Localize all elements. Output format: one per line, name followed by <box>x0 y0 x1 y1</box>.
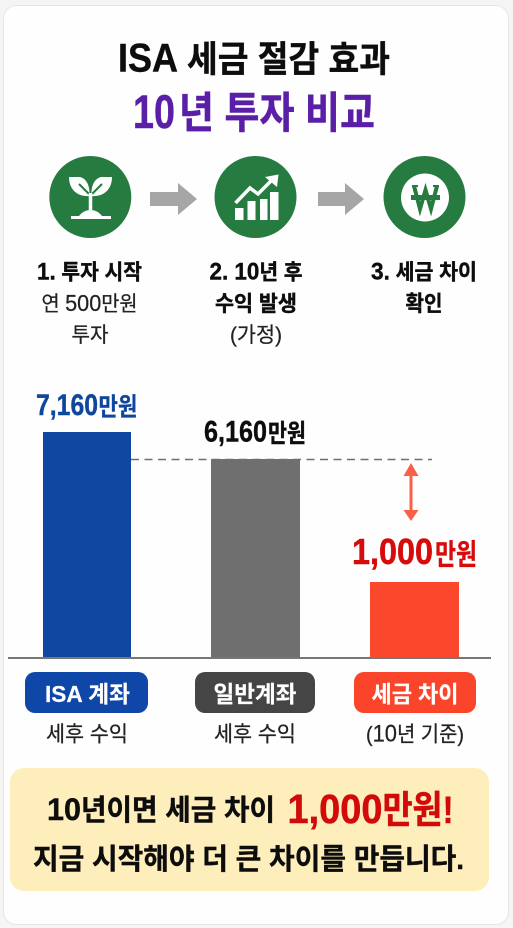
bar: general account <box>204 416 306 658</box>
icon: growth chart <box>214 156 296 238</box>
bar: general account: 만원 <box>268 420 306 448</box>
step 3 text: 3. 세금 차이 <box>371 260 477 286</box>
label: general account <box>195 672 315 746</box>
icon: sprout <box>49 156 131 238</box>
step 1 text: 연 500만원 <box>42 290 138 316</box>
step 2 text: (가정) <box>230 324 282 347</box>
bar: tax difference: 1,000 <box>352 531 433 572</box>
bar: ISA account <box>36 389 138 658</box>
label: ISA account <box>25 672 148 746</box>
step 3 text <box>371 260 477 316</box>
label: ISA account: ISA 계좌 <box>45 681 130 707</box>
step 2 text: 수익 발생 <box>215 292 297 316</box>
bar: ISA account: 만원 <box>98 394 138 422</box>
dashed reference line <box>131 458 432 460</box>
bar: tax difference <box>352 531 477 658</box>
label: ISA account: 세후 수익 <box>46 722 128 746</box>
label: general account: 세후 수익 <box>214 722 296 746</box>
callout <box>10 768 489 891</box>
icon: won coin <box>384 156 466 238</box>
label: tax difference <box>354 672 476 748</box>
step 1 text <box>37 260 142 347</box>
step 2 text: 2. 10년 후 <box>210 260 302 286</box>
label: tax difference: 세금 차이 <box>372 681 458 707</box>
chart baseline <box>8 657 491 659</box>
arrow: step 2 to step 3 <box>318 183 364 215</box>
arrow: double-headed difference <box>404 463 418 521</box>
callout: 1,000 <box>288 786 382 832</box>
label: tax difference: (10년 기준) <box>366 722 464 748</box>
bar: tax difference: 만원 <box>435 538 477 572</box>
title: 세금 절감 효과 <box>187 38 390 80</box>
step 1 text: 1. 투자 시작 <box>37 260 142 286</box>
title: 10 <box>133 85 175 138</box>
callout: 만원! <box>382 790 454 832</box>
title: 년 투자 비교 <box>179 90 375 138</box>
bar: general account: 6,160 <box>204 416 267 448</box>
step 2 text <box>210 260 302 347</box>
title <box>118 36 390 138</box>
arrow: step 1 to step 2 <box>150 183 197 215</box>
callout: 지금 시작해야 더 큰 차이를 만듭니다. <box>33 843 464 876</box>
label: general account: 일반계좌 <box>214 681 296 707</box>
bar: ISA account: 7,160 <box>36 389 98 422</box>
step 1 text: 투자 <box>72 324 108 347</box>
title: ISA <box>118 36 178 80</box>
step 3 text: 확인 <box>406 292 442 316</box>
callout: 10년이면 세금 차이 <box>47 791 275 827</box>
